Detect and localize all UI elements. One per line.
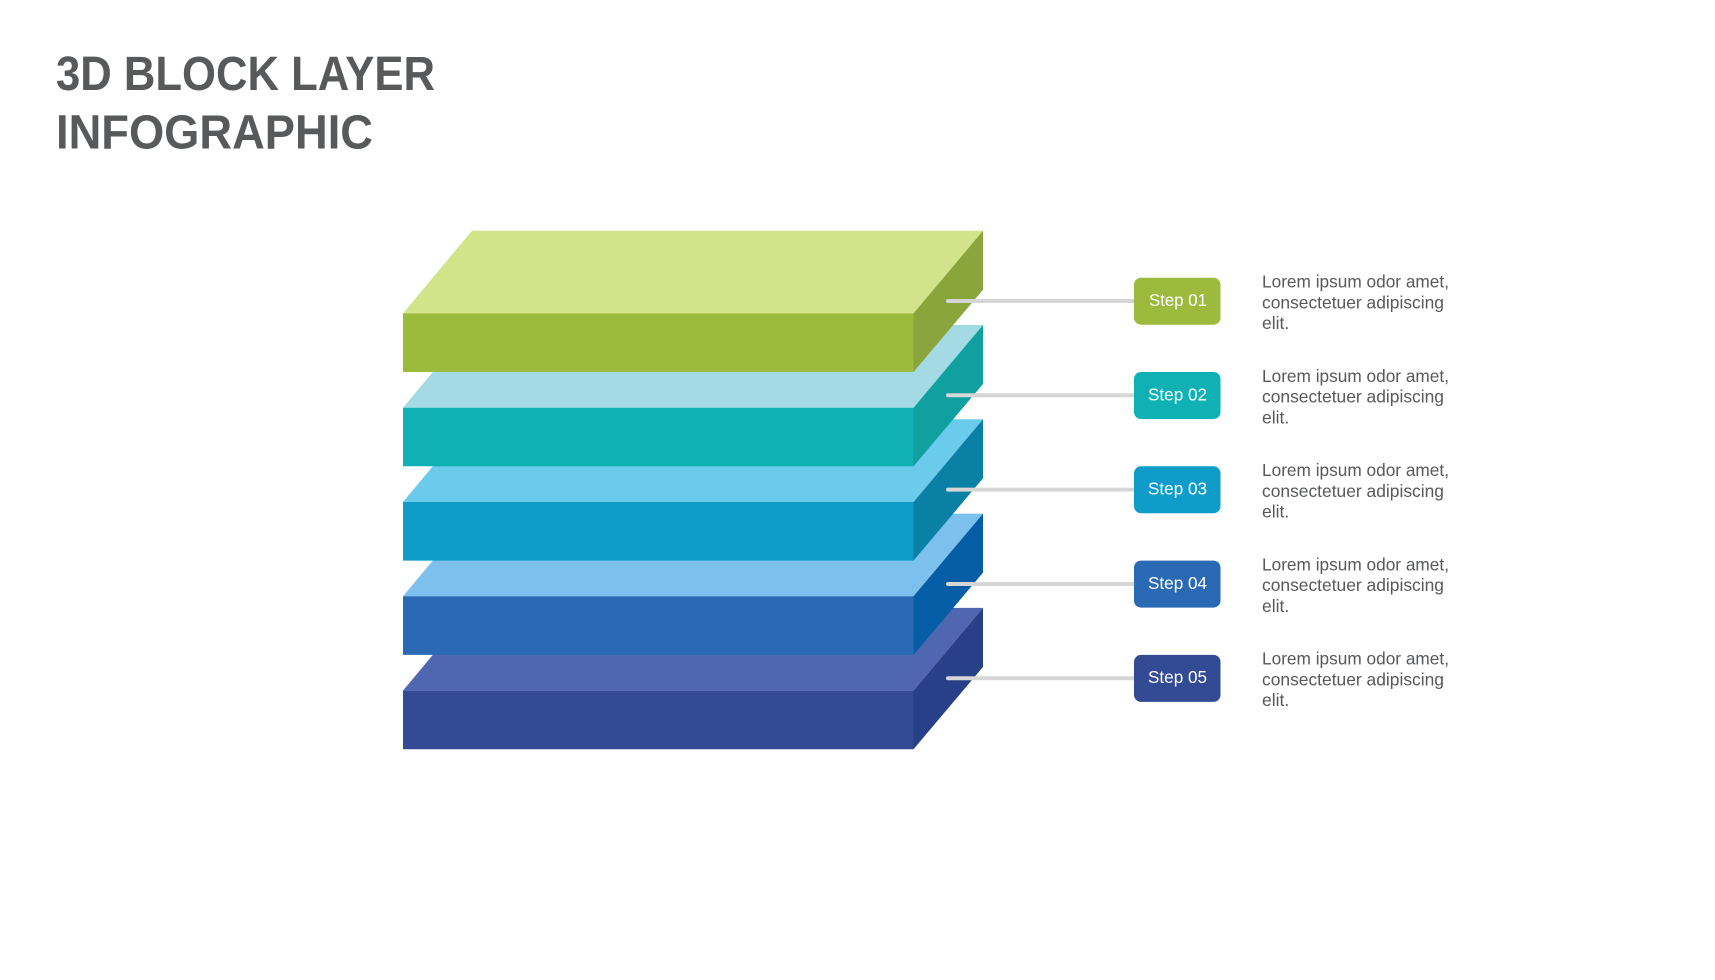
connector 04 — [948, 582, 1136, 586]
badge 05 — [1134, 655, 1220, 702]
step 02 row — [948, 366, 1449, 427]
step 01 row — [948, 272, 1449, 333]
connector 03 — [948, 488, 1136, 492]
description 05: consectetuer adipiscing — [1262, 670, 1444, 690]
description 02: consectetuer adipiscing — [1262, 387, 1444, 407]
badge 02 — [1134, 372, 1220, 419]
badge 03: Step 03 — [1148, 479, 1207, 499]
title — [56, 47, 435, 159]
block layer 2 — [403, 325, 983, 466]
description 05 — [1262, 649, 1449, 710]
description 01 — [1262, 272, 1449, 333]
connector 02 — [948, 393, 1136, 397]
description 05: Lorem ipsum odor amet, — [1262, 649, 1449, 669]
description 01: Lorem ipsum odor amet, — [1262, 272, 1449, 292]
description 04: consectetuer adipiscing — [1262, 575, 1444, 595]
description 01: consectetuer adipiscing — [1262, 292, 1444, 312]
description 03: Lorem ipsum odor amet, — [1262, 460, 1449, 480]
description 04 — [1262, 554, 1449, 616]
block layer 4 — [403, 514, 983, 655]
block layer 5 — [403, 608, 983, 749]
description 04: Lorem ipsum odor amet, — [1262, 554, 1449, 574]
description 02: Lorem ipsum odor amet, — [1262, 366, 1449, 386]
description 05: elit. — [1262, 690, 1289, 710]
badge 04: Step 04 — [1148, 573, 1207, 593]
description 03 — [1262, 460, 1449, 522]
badge 04 — [1134, 561, 1220, 608]
description 02 — [1262, 366, 1449, 427]
badge 02: Step 02 — [1148, 384, 1207, 404]
badge 03 — [1134, 466, 1220, 513]
description 04: elit. — [1262, 596, 1289, 616]
description 03: elit. — [1262, 502, 1289, 522]
step 05 row — [948, 649, 1449, 710]
3D block stack — [403, 231, 983, 749]
description 02: elit. — [1262, 407, 1289, 427]
block layer 1 — [403, 231, 983, 372]
connector 05 — [948, 676, 1136, 680]
block layer 3 — [403, 419, 983, 561]
badge 05: Step 05 — [1148, 667, 1207, 687]
title: 3D BLOCK LAYER — [56, 47, 435, 101]
description 03: consectetuer adipiscing — [1262, 481, 1444, 501]
step 04 row — [948, 554, 1449, 616]
description 01: elit. — [1262, 313, 1289, 333]
badge 01 — [1134, 278, 1220, 325]
badge 01: Step 01 — [1149, 290, 1207, 310]
title: INFOGRAPHIC — [56, 105, 373, 159]
connector 01 — [948, 299, 1136, 303]
step 03 row — [948, 460, 1449, 522]
